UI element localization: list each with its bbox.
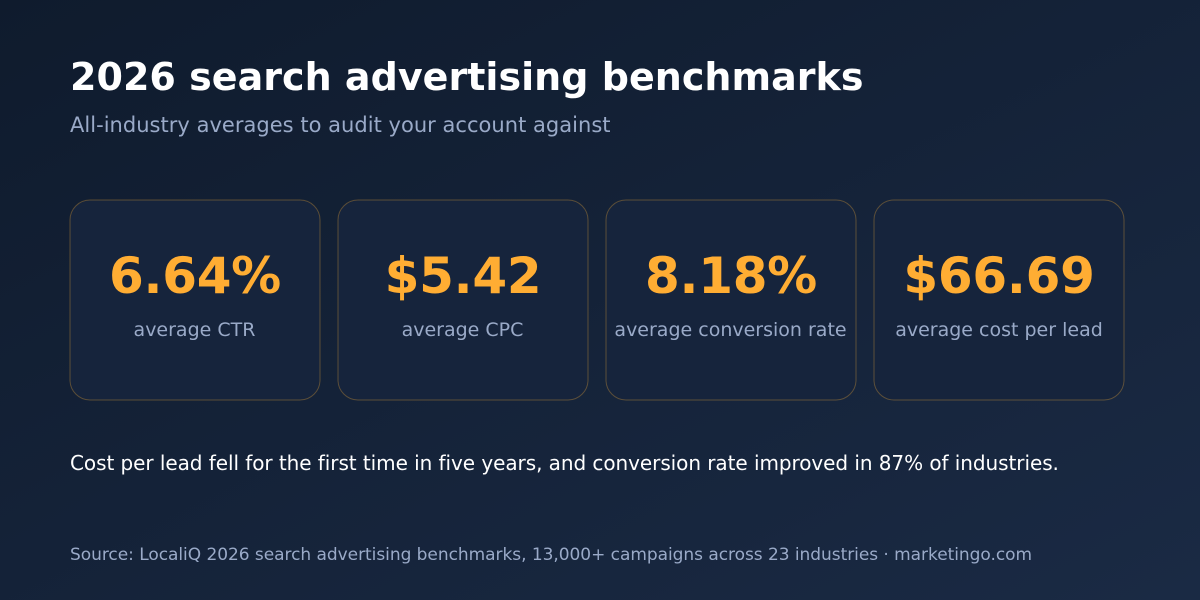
value: 6.64%: 6.64% [109,247,281,305]
subtitle: All-industry averages to audit your account against [70,113,611,137]
label: average CTR: average CTR [134,319,255,341]
label: average CPC: average CPC [402,319,523,341]
panel: average conversion rate [606,200,856,400]
label: average cost per lead: average cost per lead [895,319,1103,341]
panel: average cost per lead [874,200,1124,400]
value: 8.18%: 8.18% [645,247,817,305]
value: $66.69: $66.69 [903,247,1095,305]
value: $5.42: $5.42 [385,247,541,305]
source line: Source: LocaliQ 2026 search advertising benchmarks, 13,000+ campaigns across 23 industries · marketingo.com [70,545,1032,565]
panel: average CPC [338,200,588,400]
panel: average CTR [70,200,320,400]
label: average conversion rate: average conversion rate [614,319,847,341]
title: 2026 search advertising benchmarks [70,55,864,99]
takeaway text: Cost per lead fell for the first time in five years, and conversion rate improved in 87% of industries. [70,451,1059,475]
